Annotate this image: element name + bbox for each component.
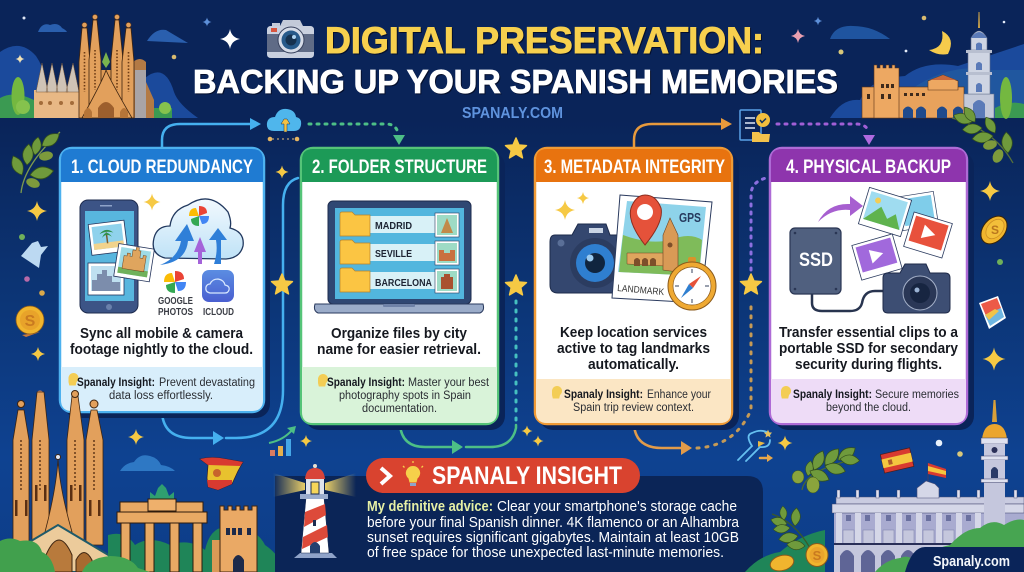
card 3 header: 3. METADATA INTEGRITY [544, 157, 725, 178]
illustration: Sagrada Familia skyline top left [0, 14, 198, 118]
side decorations left: S [25, 313, 36, 330]
side decorations right [976, 211, 1012, 329]
palace clock tower [981, 400, 1008, 530]
label: Barcelona: BARCELONA [375, 277, 432, 289]
advice text: sunset requires significant gigabytes. Maintain at least 10GB [367, 529, 739, 546]
olive branch with coins: S [813, 548, 822, 563]
connector arrows [162, 118, 875, 455]
card 2 body text [317, 325, 481, 358]
illustration: camera [550, 224, 622, 293]
advice text: before your final Spanish dinner. 4K flamenco or an Alhambra [367, 514, 740, 531]
icon: google photos [164, 271, 186, 293]
card 3 body text [557, 324, 710, 373]
side decorations left [16, 234, 48, 398]
advice text: Clear your smartphone's storage cache [497, 498, 737, 515]
site name: SPANALY.COM [462, 105, 563, 122]
illustration: cloud with upload arrows [153, 199, 243, 265]
label: google photos [158, 296, 193, 318]
card 2 header: 2. FOLDER STRUCTURE [312, 157, 487, 178]
heading line 2: BACKING UP YOUR SPANISH MEMORIES [193, 64, 838, 101]
icon: document with folder [740, 110, 770, 142]
card 4 body text: security during flights. [795, 356, 942, 373]
card 3 insight: Enhance your [647, 389, 711, 401]
icon: route with play [738, 430, 773, 462]
insight pill heading [366, 458, 640, 493]
card 3 insight: Spain trip review context. [573, 402, 694, 414]
olive branch with coins [768, 506, 828, 572]
olive branch left [8, 130, 62, 193]
card 1: cloud redundancy [60, 148, 270, 418]
illustration: stone tower [212, 506, 257, 572]
site badge [905, 547, 1024, 572]
card 3: metadata integrity [535, 148, 739, 430]
card 1 insight: Spanaly Insight: [77, 377, 155, 389]
green foreground hills [900, 520, 1024, 572]
flag: on palace pole [928, 463, 946, 481]
advice text: of free space for those unexpected last-minute memories. [367, 544, 724, 561]
card 4 insight: Spanaly Insight: [793, 389, 872, 401]
arrow: transfer [818, 196, 863, 222]
icon: icloud [202, 270, 234, 302]
card 3 insight: Spanaly Insight: [564, 389, 643, 401]
green hills behind gate [108, 527, 285, 572]
card 2 insight: documentation. [362, 403, 437, 415]
illustration: camera [883, 264, 950, 313]
card 4 insight: beyond the cloud. [826, 402, 911, 414]
label: Seville: SEVILLE [375, 248, 412, 260]
icon: bulb [781, 386, 791, 398]
illustration: Alhambra and bell tower top right [830, 12, 1024, 119]
icon: sparkles [555, 192, 589, 220]
card 3 body text: automatically. [588, 356, 679, 373]
card 1 insight: Prevent devastating [159, 377, 255, 389]
insight panel [273, 464, 763, 572]
card 2 body text: Organize files by city [331, 325, 468, 342]
card 4 header: 4. PHYSICAL BACKUP [786, 157, 951, 178]
illustration: laptop with folders [314, 201, 484, 313]
label: google photos: GOOGLE [158, 296, 193, 307]
icon: sparkle [144, 194, 160, 210]
illustration: Brandenburg Gate [117, 484, 207, 572]
lighthouse illustration [273, 464, 356, 558]
card 4 body text: portable SSD for secondary [779, 340, 959, 357]
card 2 header [302, 149, 497, 182]
label: landmark: LANDMARK [617, 283, 665, 298]
decorative sparkles [27, 166, 1006, 450]
label: GPS: GPS [679, 211, 701, 225]
title [193, 20, 838, 122]
white dot and gold dot [936, 440, 963, 457]
icon: bulb [552, 386, 562, 398]
card 3 header [536, 149, 731, 182]
icon: bulb [318, 374, 328, 386]
card 2: folder structure [301, 148, 505, 430]
decorative stars and moon top band [16, 16, 1005, 63]
icon: camera [267, 20, 314, 58]
card 3 body text: Keep location services [560, 324, 707, 341]
icon: bulb [68, 373, 78, 386]
card 1 header [61, 149, 263, 182]
card 1 body text [70, 325, 253, 358]
cloud bottom left [120, 455, 175, 471]
insight pill heading: SPANALY INSIGHT [432, 462, 622, 490]
card 1 insight [61, 367, 263, 411]
illustration: media thumbnails [852, 187, 952, 280]
card 2 insight: Spanaly Insight: [327, 377, 405, 389]
icon: chevron [381, 468, 390, 484]
icon: Spain map flag [200, 458, 243, 490]
card 4 body text: Transfer essential clips to a [779, 324, 959, 341]
label: google photos: PHOTOS [158, 307, 193, 318]
card 3 insight [536, 379, 731, 423]
label: Madrid: MADRID [375, 220, 412, 232]
card 4 header [771, 149, 966, 182]
card 2 body text: name for easier retrieval. [317, 341, 481, 358]
card 1 body text: Sync all mobile & camera [80, 325, 244, 342]
card 3 body text: active to tag landmarks [557, 340, 710, 357]
Sagrada Familia bottom left [0, 390, 110, 572]
olive branch bottom centre right [792, 444, 860, 493]
illustration: SSD drive [790, 228, 841, 294]
foreground trees [82, 556, 150, 572]
site badge: Spanaly.com [933, 554, 1010, 570]
illustration: cable [812, 291, 885, 311]
card 4: physical backup [770, 148, 974, 430]
label: icloud: ICLOUD [203, 307, 234, 318]
card 2 insight [302, 367, 497, 423]
icon: compass [668, 257, 716, 310]
palace bottom right [745, 400, 1024, 572]
illustration: phone [80, 200, 154, 313]
card 1 header: 1. CLOUD REDUNDANCY [71, 157, 253, 178]
icon: bulb [403, 461, 423, 486]
card 1 body text: footage nightly to the cloud. [70, 341, 253, 358]
card 4 insight: Secure memories [875, 389, 959, 401]
card 2 insight: photography spots in Spain [339, 390, 471, 402]
icon: bar chart with trend [269, 426, 296, 456]
illustration: geotagged photo [612, 195, 712, 303]
olive branch right [952, 104, 1013, 164]
icon: cloud upload [267, 109, 301, 141]
flag: large [880, 448, 914, 473]
side decorations right: S [991, 223, 999, 237]
card 4 body text [779, 324, 959, 373]
label: SSD: SSD [799, 250, 833, 271]
advice text: My definitive advice: [367, 498, 493, 515]
connector stars [272, 138, 761, 295]
advice text [367, 498, 740, 561]
card 2 insight: Master your best [408, 377, 490, 389]
card 1 insight: data loss effortlessly. [109, 390, 213, 402]
card 4 insight [771, 379, 966, 423]
heading line 1: DIGITAL PRESERVATION: [325, 20, 764, 61]
